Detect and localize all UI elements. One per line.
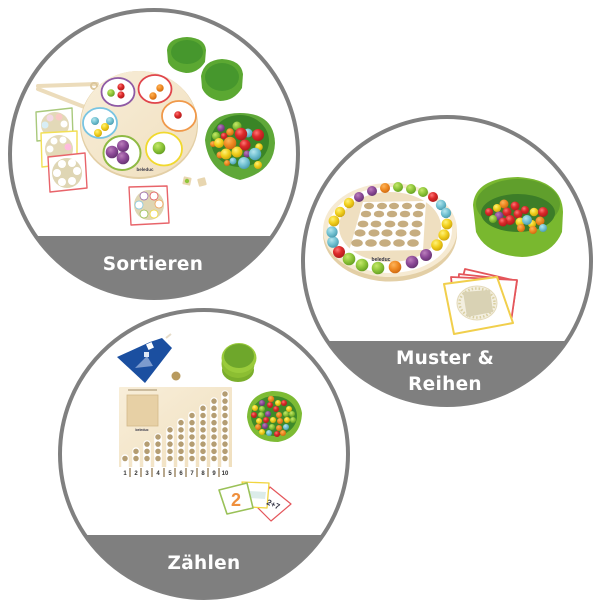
stacked green bowls: [222, 343, 256, 382]
counting board: [119, 387, 232, 477]
wooden tongs: [38, 83, 97, 108]
beads: [326, 182, 452, 274]
holes: [125, 393, 225, 459]
heading: Muster & Reihen: Muster &: [396, 348, 494, 369]
bead board: beleduc: [372, 257, 391, 263]
number tabs: 9: [212, 471, 216, 477]
heading: Muster & Reihen: [396, 348, 494, 395]
number tabs: 7: [190, 471, 194, 477]
heading: Muster & Reihen: Reihen: [408, 374, 482, 395]
card number 2: 2: [231, 490, 241, 510]
number tabs: 4: [156, 471, 160, 477]
counting board: beleduc: [135, 428, 149, 432]
white columns: [125, 394, 225, 476]
number tabs: 6: [179, 471, 183, 477]
number tabs: [119, 467, 232, 477]
number tabs: 1: [123, 471, 127, 477]
blue pouch: [117, 334, 172, 383]
number tabs: 8: [201, 471, 205, 477]
sorting board: beleduc: [136, 167, 154, 172]
wooden die: [172, 372, 180, 380]
heading: Sortieren: Sortieren: [103, 254, 203, 275]
circle frame: Sortieren: [10, 10, 298, 298]
panel: Zählen: [50, 310, 360, 600]
card sum: 2+7: [265, 498, 282, 512]
small green bowls: [167, 37, 243, 101]
bead board: [323, 182, 457, 282]
pattern cards: [444, 269, 517, 334]
number cards: [219, 482, 291, 521]
circle frame: Muster & Reihen: [303, 117, 591, 405]
bowl of counting balls: [247, 391, 302, 442]
bowl of beads: [473, 177, 563, 257]
bowl of sorting balls: [205, 113, 275, 180]
pattern cards: [36, 108, 169, 225]
panel: Muster & Reihen: [295, 117, 600, 411]
number tabs: 2: [134, 471, 138, 477]
number tabs: 10: [222, 471, 229, 477]
grey label band: Zählen: [88, 535, 320, 596]
sorting board: [80, 71, 198, 179]
heading: Zählen: Zählen: [168, 553, 240, 574]
number tabs: 5: [168, 471, 172, 477]
grey label band: Sortieren: [38, 236, 270, 296]
panel: Sortieren: [0, 10, 310, 306]
number tabs: 3: [145, 471, 149, 477]
dice: [182, 176, 207, 187]
grey label band: Muster & Reihen: [330, 341, 564, 403]
hole grid: [349, 201, 426, 251]
circle frame: Zählen: [60, 310, 348, 598]
